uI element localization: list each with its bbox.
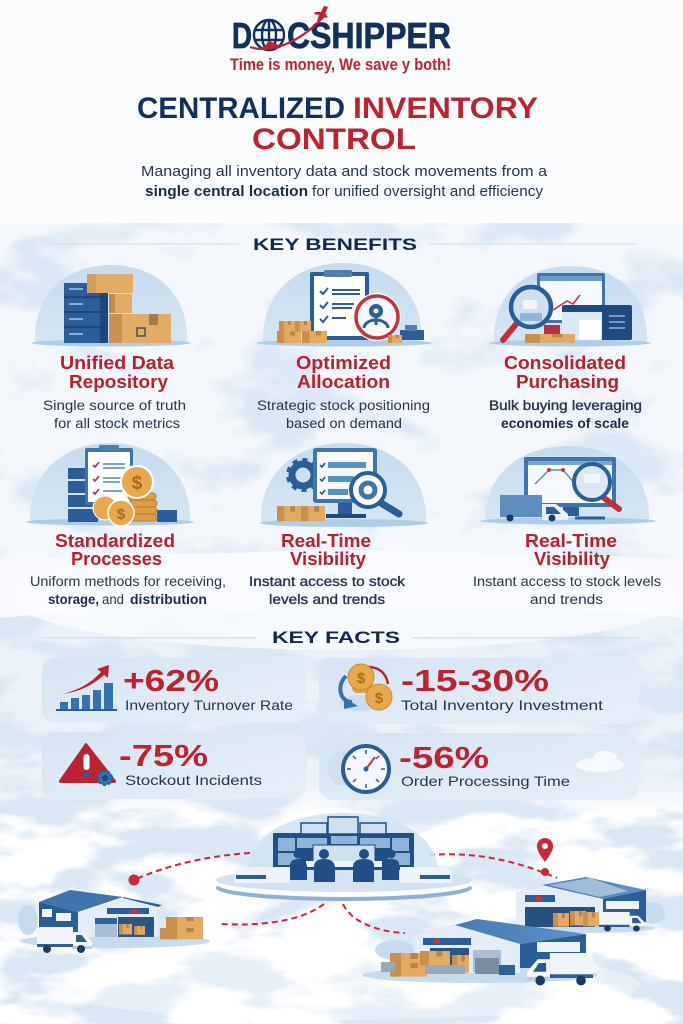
logo: C (287, 15, 310, 56)
icon: coins and arrows: $ (357, 670, 366, 687)
title: CONTROL (252, 123, 416, 156)
description (473, 574, 661, 607)
illustration: left warehouse (18, 890, 210, 953)
value: +62% (123, 663, 219, 698)
title (137, 92, 538, 156)
icon: clipboard and coins: $ (117, 506, 126, 523)
description (489, 398, 642, 431)
heading: key benefits: KEY BENEFITS (253, 235, 417, 254)
description (257, 398, 430, 431)
description: Single source of truth (43, 398, 186, 413)
icon: plane (314, 6, 328, 21)
description: economies of scale (501, 416, 629, 431)
title: INVENTORY (353, 92, 538, 125)
label: Total Inventory Investment (401, 697, 603, 713)
description: Uniform methods for receiving, (30, 574, 226, 589)
icon: clipboard and coins (26, 443, 194, 526)
icon: clipboard and target (256, 263, 432, 346)
icon: monitor and gears (260, 443, 428, 527)
heading: Repository (69, 372, 168, 392)
description: Instant access to stock (249, 574, 405, 589)
illustration: central control room (216, 813, 472, 901)
card: inventory turnover rate (42, 658, 306, 723)
card: stockout incidents (42, 732, 306, 799)
tagline: Time is money, We save y both! (230, 56, 451, 74)
subtitle: single central location (145, 183, 308, 200)
icon: servers and boxes (31, 265, 191, 346)
subtitle (141, 163, 548, 200)
description: distribution (130, 592, 207, 607)
label: Inventory Turnover Rate (125, 697, 293, 713)
logo: D (232, 15, 252, 56)
description (43, 398, 186, 431)
panel: consolidated purchasing (489, 266, 651, 431)
icon: monitor and truck (480, 446, 656, 524)
description (30, 574, 226, 607)
illustration: front right warehouse (362, 919, 598, 986)
heading (504, 353, 626, 392)
description (249, 574, 405, 607)
page background (0, 223, 683, 1024)
icon: clipboard and coins: $ (132, 473, 143, 494)
value: -75% (119, 738, 208, 773)
description: Bulk buying leveraging (489, 398, 642, 413)
description: Instant access to stock levels (473, 574, 661, 589)
description: and (102, 592, 124, 607)
card: total inventory investment (319, 658, 639, 724)
description: for all stock metrics (54, 416, 180, 431)
label: Stockout Incidents (125, 772, 262, 788)
operators (290, 849, 399, 882)
heading: key facts: KEY FACTS (272, 628, 400, 647)
arrow: dashed network routes (128, 853, 557, 933)
logo: SHIPPER (310, 15, 451, 56)
icon: rising bar chart (56, 665, 117, 711)
value: -56% (399, 740, 489, 775)
heading (60, 353, 175, 392)
icon: location pin (537, 838, 553, 862)
heading: Processes (71, 549, 162, 569)
icon: coins and arrows: $ (375, 690, 384, 707)
heading (55, 531, 175, 569)
panel: real-time visibility (gear) (249, 443, 428, 607)
heading: Unified Data (60, 353, 175, 373)
heading: Visibility (534, 549, 610, 569)
description: Strategic stock positioning (257, 398, 430, 413)
heading: Optimized (296, 353, 391, 373)
logo (232, 6, 451, 56)
heading: Real-Time (525, 531, 617, 551)
description: levels and trends (269, 592, 385, 607)
panel: optimized allocation (256, 263, 432, 431)
illustration: back right warehouse (515, 877, 665, 933)
title: CENTRALIZED (137, 92, 345, 125)
icon: magnifier and dashboard (489, 266, 651, 346)
panel: unified data repository (31, 265, 191, 431)
heading: Purchasing (516, 372, 619, 392)
heading: Consolidated (504, 353, 626, 373)
label: Order Processing Time (401, 773, 570, 789)
description: storage, (48, 592, 99, 607)
icon: warning triangle (60, 744, 115, 785)
heading: Visibility (290, 549, 366, 569)
icon: globe (254, 20, 284, 50)
heading (296, 353, 391, 392)
boxes (160, 917, 203, 939)
icon: stopwatch (327, 746, 389, 792)
subtitle: for unified oversight and efficiency (312, 183, 544, 200)
heading: Allocation (297, 372, 390, 392)
heading (525, 531, 617, 569)
description: and trends (530, 592, 603, 607)
card: order processing time (319, 733, 639, 800)
description: based on demand (286, 416, 402, 431)
subtitle: Managing all inventory data and stock movements from a (141, 163, 548, 180)
panel: real-time visibility (truck) (473, 446, 661, 607)
heading (281, 531, 371, 569)
value: -15-30% (401, 663, 549, 698)
icon: coins and arrows (340, 664, 392, 711)
heading: Real-Time (281, 531, 371, 551)
heading: Standardized (55, 531, 175, 551)
panel: standardized processes (26, 443, 226, 607)
